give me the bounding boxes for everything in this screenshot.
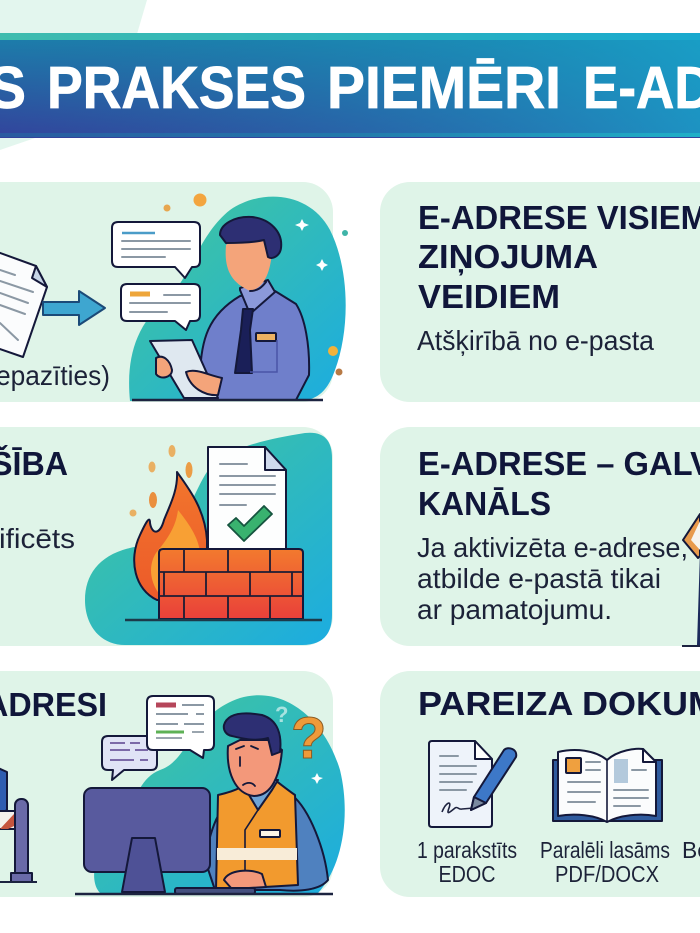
heading: ZIŅOJUMA	[418, 238, 598, 275]
figure: worker in safety vest	[205, 713, 328, 891]
heading: KANĀLS	[418, 485, 551, 522]
panel: correct documents	[380, 671, 700, 897]
body text: Atšķirībā no e-pasta	[417, 325, 654, 356]
icon: open book	[553, 749, 662, 822]
panel: reach the e-address	[0, 671, 345, 897]
speech bubble: small	[102, 736, 157, 780]
body text: ar pamatojumu.	[417, 594, 612, 625]
icon: question marks: ?	[291, 706, 326, 771]
heading	[418, 445, 700, 522]
icon: signed document with pen	[429, 741, 516, 827]
panel: review messages	[0, 182, 348, 402]
panel: firewall security	[0, 427, 333, 646]
icon: computer monitor	[84, 788, 255, 894]
decorative mint corner shape	[0, 0, 147, 34]
speech bubble: top	[112, 222, 200, 278]
body text: atbilde e-pastā tikai	[417, 563, 661, 594]
heading	[418, 199, 700, 315]
caption: readable PDF/DOCX	[540, 837, 670, 887]
heading: PAREIZA DOKUM	[418, 685, 700, 722]
icon: document	[0, 250, 47, 357]
speech bubble: bottom	[121, 284, 200, 330]
caption: signed EDOC: EDOC	[438, 861, 496, 887]
figure: office worker with tablet	[150, 217, 309, 400]
caption: signed EDOC	[417, 837, 517, 887]
illustration backdrop blob	[94, 695, 345, 893]
ground line	[125, 619, 322, 621]
caption: signed EDOC: 1 parakstīts	[417, 837, 517, 863]
icon: brick wall	[159, 549, 303, 619]
heading: VEIDIEM	[418, 278, 560, 315]
icon: question marks	[275, 702, 326, 784]
caption: readable PDF/DOCX: PDF/DOCX	[555, 861, 659, 887]
ground line	[132, 399, 323, 401]
panel: e-address for all message types	[380, 182, 700, 402]
figure: partial person	[682, 514, 700, 646]
title text: PIEMĒRI	[327, 55, 561, 121]
decorative mint strip under banner	[0, 138, 35, 150]
body text	[417, 532, 688, 625]
title banner	[0, 33, 700, 138]
icon: document with check	[208, 447, 286, 551]
decorative dots	[164, 194, 348, 376]
caption: readable PDF/DOCX: Paralēli lasāms	[540, 837, 670, 863]
title text	[0, 55, 700, 121]
panel: e-address as main channel	[380, 427, 700, 646]
illustration backdrop blob	[129, 197, 346, 401]
speech bubble: large	[147, 696, 214, 758]
ground line	[75, 893, 333, 895]
body text: Ja aktivizēta e-adrese,	[417, 532, 688, 563]
icon: flame	[130, 445, 207, 600]
title text: PRAKSES	[47, 55, 306, 121]
illustration backdrop blob	[85, 433, 332, 645]
icon: barrier post	[0, 768, 37, 882]
icon: question marks: ?	[275, 702, 288, 727]
arrow	[43, 291, 105, 325]
text fragment: ificēts	[0, 523, 75, 554]
